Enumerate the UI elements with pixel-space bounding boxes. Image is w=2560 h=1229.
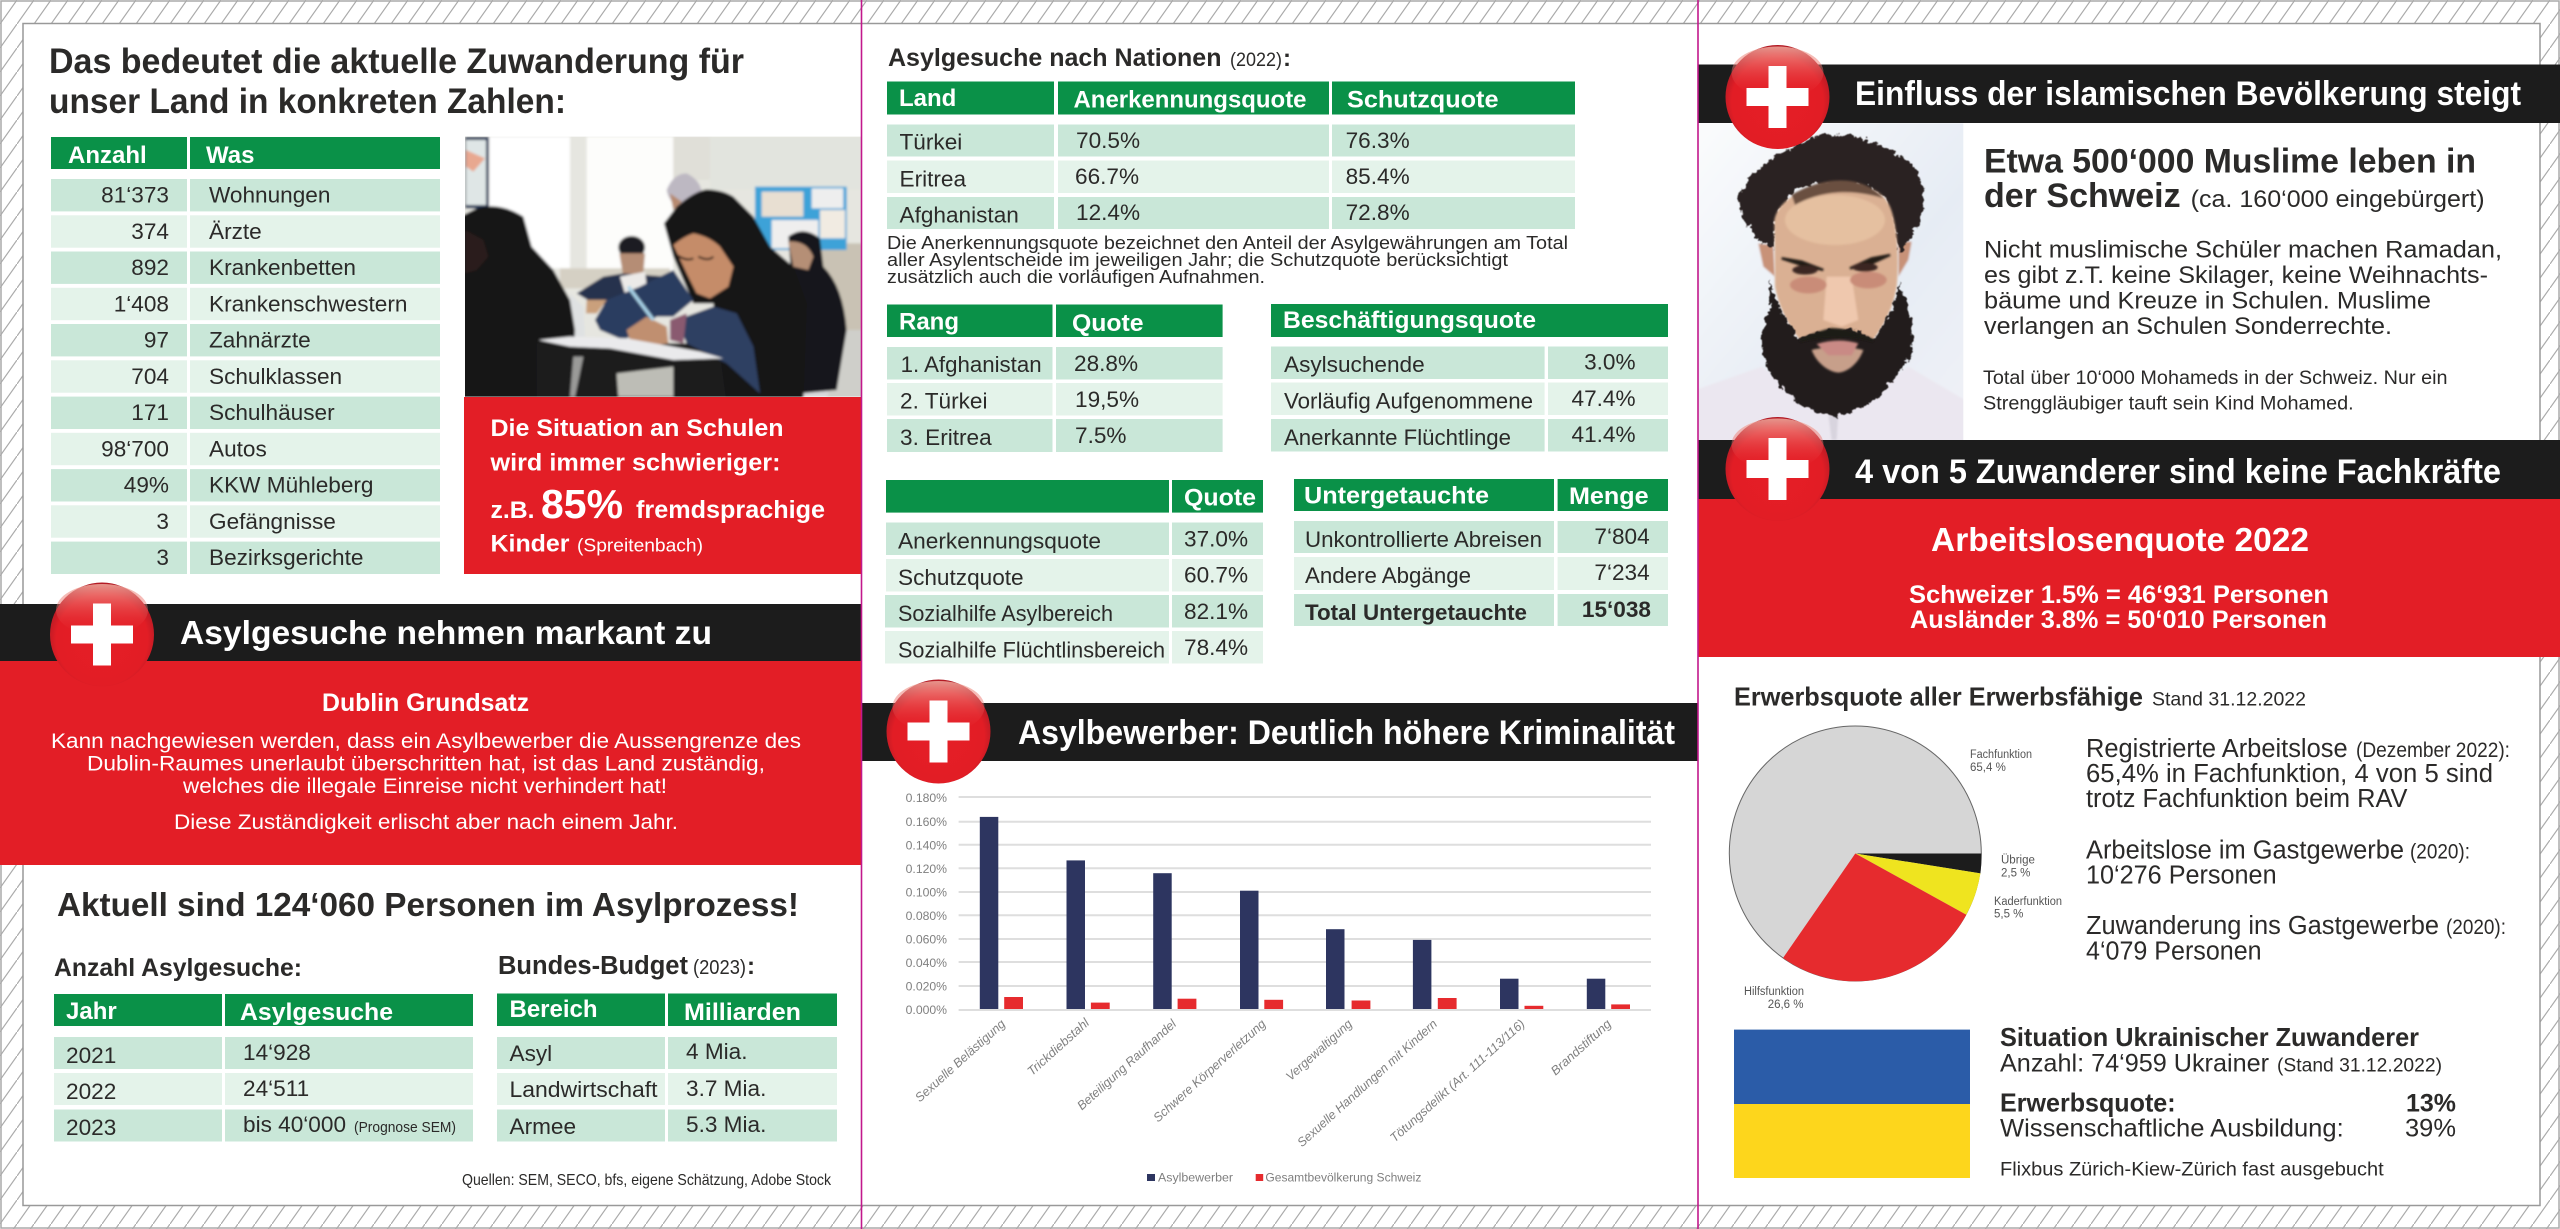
gridlines and y axis: 0.040% <box>906 956 947 970</box>
text: Registrierte Arbeitslose: (2020): <box>2410 841 2470 864</box>
panel: middle column <box>862 44 1698 1184</box>
table: Quote gesamt: 82.1% <box>1184 599 1248 624</box>
table rows: Krankenbetten <box>209 255 356 280</box>
banner: Einfluss der islamischen Bevoelkerung <box>1698 64 2560 123</box>
callout: Situation an Schulen: fremdsprachige <box>636 496 825 524</box>
gridlines and y axis: 0.100% <box>906 886 947 900</box>
table rows: 1‘408 <box>114 291 169 316</box>
pie chart: Funktionen der Erwerbstaetigen: 26,6 % <box>1768 999 1804 1011</box>
category labels: Brandstiftung <box>1548 1017 1614 1078</box>
text: Situation Ukrainischer Zuwanderer: Wissenschaftliche Ausbildung: <box>2000 1115 2344 1143</box>
table: Anerkennungsquote nach Land: 70.5% <box>1076 128 1140 153</box>
table: Asylgesuche pro Jahr: 14‘928 <box>243 1040 311 1065</box>
table: Asylgesuche pro Jahr: 2021 <box>66 1043 116 1068</box>
table: Anerkennungsquote nach Land: 66.7% <box>1075 164 1139 189</box>
chart legend <box>1147 1170 1421 1184</box>
banner: Deutlich hoehere Kriminalitaet: Asylbewerber: Deutlich höhere Kriminalität <box>1018 714 1675 752</box>
bars: Gesamtbevoelkerung Schweiz <box>1004 997 1630 1009</box>
pie chart: Funktionen der Erwerbstaetigen: Hilfsfunktion <box>1744 986 1804 998</box>
callout: Situation an Schulen: z.B. <box>490 497 534 524</box>
callout: Situation an Schulen: 85% <box>541 481 623 527</box>
table: Bundes-Budget: 3.7 Mia. <box>686 1076 766 1101</box>
callout: Situation an Schulen: Kinder <box>490 531 570 558</box>
panel: Arbeitslosenquote 2022: Ausländer 3.8% = 50‘010 Personen <box>1910 606 2327 634</box>
gridlines and y axis: 0.120% <box>906 862 947 876</box>
gridlines and y axis: 0.140% <box>906 838 947 852</box>
title: Zuwanderung in konkreten Zahlen <box>49 42 744 121</box>
table header: Was <box>206 142 254 169</box>
table: Beschaeftigungsquote: Asylsuchende <box>1284 352 1425 377</box>
banner: Einfluss der islamischen Bevoelkerung: Einfluss der islamischen Bevölkerung steigt <box>1855 75 2521 113</box>
table: Untergetauchte: Menge <box>1569 483 1649 510</box>
table: Asylgesuche pro Jahr: Jahr <box>66 998 117 1025</box>
chart legend: Asylbewerber <box>1158 1170 1233 1184</box>
table: Bundes-Budget: Asyl <box>510 1041 552 1066</box>
banner: Deutlich hoehere Kriminalitaet <box>862 703 1698 761</box>
category labels: Beteiligung Raufhandel <box>1075 1016 1180 1113</box>
table: Quote gesamt: Sozialhilfe Flüchtlinsbereich <box>898 637 1165 662</box>
table: Beschaeftigungsquote: Beschäftigungsquote <box>1283 307 1536 334</box>
text: Situation Ukrainischer Zuwanderer <box>2000 1022 2456 1180</box>
heading: Erwerbsquote aller Erwerbsfaehige: Stand 31.12.2022 <box>2152 689 2306 710</box>
category labels: Schwere Körperverletzung <box>1151 1017 1269 1125</box>
table: Beschaeftigungsquote: 3.0% <box>1584 350 1636 374</box>
text: Muslime in der Schweiz: der Schweiz <box>1984 177 2181 215</box>
icon: Swiss cross badge <box>1726 45 1830 149</box>
table: Rang / Quote <box>887 304 1223 452</box>
table: Anerkennungsquote nach Land: Türkei <box>900 130 962 155</box>
table: Asylgesuche pro Jahr: Asylgesuche <box>240 999 393 1026</box>
panel: Dublin Grundsatz: Dublin-Raumes unerlaubt überschritten hat, ist das Land zuständig, <box>87 750 765 776</box>
table: Asylgesuche pro Jahr: 2022 <box>66 1079 116 1104</box>
table: Quote gesamt: Sozialhilfe Asylbereich <box>898 601 1113 626</box>
text: Erklaerung Anerkennungsquote: aller Asylentscheide im jeweiligen Jahr; die Schutzquote berücksichtigt <box>887 249 1509 270</box>
table rows: 3 <box>156 545 169 570</box>
table: Rang / Quote: 3. Eritrea <box>900 425 992 450</box>
table rows: Krankenschwestern <box>209 291 407 316</box>
table rows: Ärzte <box>209 219 262 244</box>
table: Untergetauchte: Untergetauchte <box>1304 482 1489 510</box>
pie chart: Funktionen der Erwerbstaetigen <box>1729 726 2062 1011</box>
table rows: Gefängnisse <box>209 509 336 534</box>
panel: left column <box>0 42 870 1189</box>
table: Bundes-Budget: Landwirtschaft <box>510 1077 658 1102</box>
table: Quote gesamt: Anerkennungsquote <box>898 529 1101 554</box>
pie chart: Funktionen der Erwerbstaetigen: 65,4 % <box>1970 762 2006 774</box>
table: Asylgesuche pro Jahr: 24‘511 <box>243 1076 309 1101</box>
banner: Asylgesuche nehmen markant zu: Asylgesuche nehmen markant zu <box>180 615 712 652</box>
table: Anerkennungsquote nach Land: Anerkennungsquote <box>1074 86 1306 114</box>
text: Registrierte Arbeitslose: 65,4% in Fachfunktion, 4 von 5 sind <box>2086 760 2493 788</box>
heading: Anzahl Asylgesuche: Anzahl Asylgesuche: <box>54 955 302 982</box>
table: Bundes-Budget: Bereich <box>510 996 598 1023</box>
table header: Anzahl <box>68 142 147 169</box>
table: Asylgesuche pro Jahr: 2023 <box>66 1115 116 1140</box>
heading: Bundes-Budget: Bundes-Budget <box>498 952 688 980</box>
text: Situation Ukrainischer Zuwanderer: 39% <box>2405 1115 2456 1143</box>
text: Registrierte Arbeitslose: Arbeitslose im Gastgewerbe <box>2086 837 2404 865</box>
text: Muslime in der Schweiz: Total über 10‘000 Mohameds in der Schweiz. Nur ein <box>1983 368 2448 389</box>
panel: Dublin Grundsatz: Kann nachgewiesen werden, dass ein Asylbewerber die Aussengrenze des <box>51 728 801 753</box>
text: Muslime in der Schweiz: bäume und Kreuze in Schulen. Muslime <box>1984 288 2431 314</box>
table: Quote gesamt: Schutzquote <box>898 565 1024 590</box>
bar chart: Kriminalitaet Asylbewerber vs Gesamtbevoelkerung <box>906 791 1651 1184</box>
table: Asylgesuche pro Jahr: bis 40‘000 <box>243 1112 346 1137</box>
banner: 4 von 5 Zuwanderer: 4 von 5 Zuwanderer sind keine Fachkräfte <box>1855 453 2501 491</box>
panel: Dublin Grundsatz: Diese Zuständigkeit erlischt aber nach einem Jahr. <box>174 809 678 834</box>
text: Muslime in der Schweiz: es gibt z.T. keine Skilager, keine Weihnachts- <box>1984 262 2488 289</box>
chart legend: Gesamtbevölkerung Schweiz <box>1265 1170 1421 1184</box>
table: Quote gesamt: Quote <box>1184 485 1256 512</box>
text: Situation Ukrainischer Zuwanderer: Anzahl: 74‘959 Ukrainer <box>2000 1050 2269 1078</box>
text: Erklaerung Anerkennungsquote <box>887 232 1568 287</box>
table: Untergetauchte: 7‘234 <box>1594 560 1650 585</box>
text: Erklaerung Anerkennungsquote: zusätzlich auch die vorläufigen Aufnahmen. <box>887 266 1265 287</box>
table: Untergetauchte: Andere Abgänge <box>1305 563 1471 588</box>
text: Registrierte Arbeitslose: Registrierte Arbeitslose <box>2086 735 2348 763</box>
title: Zuwanderung in konkreten Zahlen: Das bedeutet die aktuelle Zuwanderung für <box>49 42 744 81</box>
table rows: Bezirksgerichte <box>209 545 363 570</box>
table: Anerkennungsquote nach Land <box>887 82 1575 229</box>
pie chart: Funktionen der Erwerbstaetigen: Übrige <box>2001 854 2035 866</box>
table rows: Autos <box>209 436 267 461</box>
gridlines and y axis <box>906 791 1651 1017</box>
photo: portrait of bearded man <box>1695 120 1965 443</box>
gridlines and y axis: 0.160% <box>906 815 947 829</box>
table: Anzahl / Was <box>51 137 440 574</box>
callout: Situation an Schulen <box>464 397 861 574</box>
pie chart: Funktionen der Erwerbstaetigen: 2,5 % <box>2001 867 2030 879</box>
banner: Asylgesuche nehmen markant zu <box>0 604 861 661</box>
table header <box>51 137 440 169</box>
text: Registrierte Arbeitslose: (Dezember 2022): <box>2356 739 2510 762</box>
table: Anerkennungsquote nach Land: Schutzquote <box>1347 86 1498 114</box>
pie chart: Funktionen der Erwerbstaetigen: 5,5 % <box>1994 909 2023 921</box>
table rows: Schulhäuser <box>209 400 335 425</box>
heading: Asylgesuche nach Nationen: (2022) <box>1230 50 1282 71</box>
table: Anerkennungsquote nach Land: 72.8% <box>1346 200 1410 225</box>
text: Situation Ukrainischer Zuwanderer: 13% <box>2406 1090 2456 1118</box>
table: Rang / Quote: 1. Afghanistan <box>901 352 1042 377</box>
pie chart: Funktionen der Erwerbstaetigen: Fachfunktion <box>1970 749 2032 761</box>
text: Registrierte Arbeitslose: 10‘276 Personen <box>2086 861 2277 889</box>
heading: Asylgesuche nach Nationen: Asylgesuche nach Nationen <box>888 44 1222 72</box>
category labels <box>912 1015 1614 1150</box>
text: Situation Ukrainischer Zuwanderer: Flixbus Zürich-Kiew-Zürich fast ausgebucht <box>2000 1160 2384 1180</box>
table rows: 3 <box>156 509 169 534</box>
gridlines and y axis: 0.180% <box>906 791 947 805</box>
source note: Quellen: SEM, SECO, bfs, eigene Schätzung, Adobe Stock <box>462 1172 832 1189</box>
table: Asylgesuche pro Jahr: (Prognose SEM) <box>354 1120 456 1136</box>
panel: Dublin Grundsatz <box>0 661 861 865</box>
table rows: Schulklassen <box>209 364 342 389</box>
icon: Swiss cross badge <box>1726 417 1830 521</box>
table: Rang / Quote: 2. Türkei <box>900 388 988 414</box>
table: Rang / Quote: 28.8% <box>1074 351 1138 376</box>
text: Muslime in der Schweiz <box>1983 143 2502 414</box>
table: Rang / Quote: Rang <box>899 309 959 336</box>
table: Anerkennungsquote nach Land: 85.4% <box>1346 164 1410 189</box>
text: Muslime in der Schweiz: (ca. 160‘000 eingebürgert) <box>2191 186 2485 213</box>
bars: Asylbewerber <box>980 817 1605 1009</box>
table: Quote gesamt: 37.0% <box>1184 526 1248 551</box>
heading: Asylgesuche nach Nationen: : <box>1283 45 1291 72</box>
table: Rang / Quote: Quote <box>1072 310 1144 337</box>
table: Bundes-Budget: Armee <box>510 1114 576 1139</box>
title: Zuwanderung in konkreten Zahlen: unser Land in konkreten Zahlen: <box>49 82 566 121</box>
text: Erklaerung Anerkennungsquote: Die Anerkennungsquote bezeichnet den Anteil der Asylgewährungen am Total <box>887 232 1568 253</box>
category labels: Tötungsdelikt (Art. 111-113/116) <box>1387 1017 1528 1145</box>
table: Beschaeftigungsquote <box>1271 304 1668 452</box>
table rows: 98‘700 <box>101 436 169 461</box>
table rows: 171 <box>131 400 169 425</box>
callout: Situation an Schulen: (Spreitenbach) <box>577 536 703 556</box>
table: Rang / Quote: 7.5% <box>1075 423 1126 448</box>
panel: Arbeitslosenquote 2022: Arbeitslosenquote 2022 <box>1931 522 2309 559</box>
table: Bundes-Budget: Milliarden <box>684 999 801 1026</box>
panel: right column <box>1695 45 2560 1180</box>
icon: Swiss cross badge <box>886 680 990 784</box>
callout: Situation an Schulen: wird immer schwieriger: <box>489 450 780 476</box>
icon: Ukrainian flag <box>1734 1030 1970 1178</box>
gridlines and y axis: 0.020% <box>906 980 947 994</box>
table: Bundes-Budget: 4 Mia. <box>686 1039 748 1064</box>
category labels: Trickdiebstahl <box>1025 1015 1093 1078</box>
table rows: 892 <box>131 255 169 280</box>
text: Muslime in der Schweiz: Etwa 500‘000 Muslime leben in <box>1984 143 2476 181</box>
heading: Bundes-Budget: (2023) <box>693 957 746 979</box>
table: Beschaeftigungsquote: 41.4% <box>1572 422 1636 447</box>
text: Muslime in der Schweiz: Strenggläubiger tauft sein Kind Mohamed. <box>1983 394 2354 414</box>
gridlines and y axis: 0.000% <box>906 1003 947 1017</box>
icon: Swiss cross badge <box>50 582 154 686</box>
category labels: Vergewaltigung <box>1283 1017 1355 1083</box>
table rows <box>51 179 440 574</box>
table: Beschaeftigungsquote: 47.4% <box>1572 386 1636 411</box>
table: Bundes-Budget <box>497 994 837 1142</box>
callout: Situation an Schulen: Die Situation an Schulen <box>490 415 784 442</box>
panel: Dublin Grundsatz: welches die illegale Einreise nicht verhindert hat! <box>182 773 667 798</box>
heading: Bundes-Budget: : <box>747 953 755 980</box>
text: Situation Ukrainischer Zuwanderer: Situation Ukrainischer Zuwanderer <box>2000 1022 2419 1052</box>
gridlines and y axis: 0.060% <box>906 932 947 946</box>
table: Quote gesamt: 78.4% <box>1184 635 1248 660</box>
banner: 4 von 5 Zuwanderer <box>1698 440 2560 499</box>
text: Registrierte Arbeitslose: 4‘079 Personen <box>2086 938 2262 966</box>
text: Situation Ukrainischer Zuwanderer: (Stand 31.12.2022) <box>2277 1056 2442 1077</box>
table: Untergetauchte <box>1294 479 1668 626</box>
table: Asylgesuche pro Jahr <box>54 994 473 1142</box>
table: Quote gesamt: 60.7% <box>1184 562 1248 587</box>
table: Untergetauchte: 7‘804 <box>1594 524 1650 549</box>
heading: Personen im Asylprozess: Aktuell sind 124‘060 Personen im Asylprozess! <box>57 887 799 924</box>
table: Anerkennungsquote nach Land: Land <box>899 85 956 112</box>
table rows: 49% <box>124 473 169 498</box>
table: Quote gesamt <box>885 480 1263 664</box>
table rows: KKW Mühleberg <box>209 473 374 498</box>
pie chart: Funktionen der Erwerbstaetigen: Kaderfunktion <box>1994 896 2062 908</box>
table: Rang / Quote: 19,5% <box>1075 387 1139 412</box>
table: Anerkennungsquote nach Land: 76.3% <box>1346 128 1410 153</box>
table: Beschaeftigungsquote: Anerkannte Flüchtlinge <box>1284 425 1511 450</box>
table: Anerkennungsquote nach Land: Eritrea <box>900 166 966 192</box>
table rows: 704 <box>131 364 169 389</box>
photo: classroom with student writing <box>460 130 870 403</box>
table: Bundes-Budget: 5.3 Mia. <box>686 1112 766 1137</box>
text: Registrierte Arbeitslose: trotz Fachfunktion beim RAV <box>2086 785 2408 813</box>
text: Muslime in der Schweiz: verlangen an Schulen Sonderrechte. <box>1984 313 2392 340</box>
table: Untergetauchte: 15‘038 <box>1582 597 1651 622</box>
gridlines and y axis: 0.080% <box>906 909 947 923</box>
table rows: 81‘373 <box>101 182 169 208</box>
text: Muslime in der Schweiz: Nicht muslimische Schüler machen Ramadan, <box>1984 237 2502 264</box>
text: Registrierte Arbeitslose: Zuwanderung ins Gastgewerbe <box>2086 912 2439 940</box>
panel: Dublin Grundsatz: Dublin Grundsatz <box>322 690 529 717</box>
table: Untergetauchte: Total Untergetauchte <box>1305 600 1527 625</box>
table: Untergetauchte: Unkontrollierte Abreisen <box>1305 527 1542 552</box>
table rows: 97 <box>144 328 169 352</box>
table: Anerkennungsquote nach Land: 12.4% <box>1076 200 1140 225</box>
panel: Arbeitslosenquote 2022: Schweizer 1.5% = 46‘931 Personen <box>1909 581 2329 609</box>
table rows: Zahnärzte <box>209 328 311 352</box>
table rows: 374 <box>131 219 169 244</box>
table: Anerkennungsquote nach Land: Afghanistan <box>900 202 1019 228</box>
text: Registrierte Arbeitslose: (2020): <box>2446 916 2506 939</box>
heading: Erwerbsquote aller Erwerbsfaehige: Erwerbsquote aller Erwerbsfähige <box>1734 681 2143 711</box>
text: Situation Ukrainischer Zuwanderer: Erwerbsquote: <box>2000 1088 2176 1118</box>
category labels: Sexuelle Belästigung <box>912 1017 1008 1105</box>
category labels: Sexuelle Handlungen mit Kindern <box>1295 1017 1440 1150</box>
table: Beschaeftigungsquote: Vorläufig Aufgenommene <box>1284 388 1533 414</box>
text: Registrierte Arbeitslose <box>2086 735 2510 966</box>
panel: Arbeitslosenquote 2022 <box>1698 499 2560 657</box>
table rows: Wohnungen <box>209 182 330 208</box>
